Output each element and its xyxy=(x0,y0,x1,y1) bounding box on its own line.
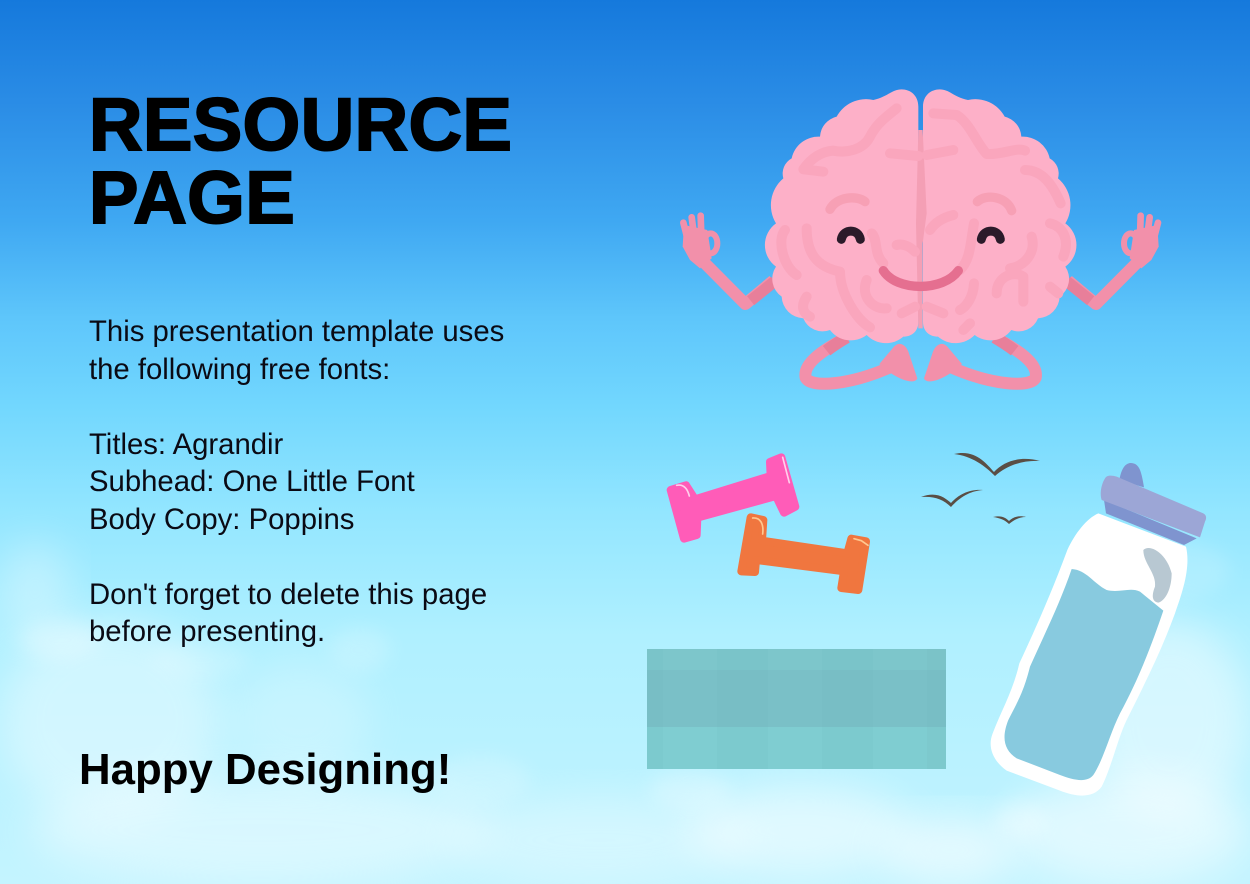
body text: the following free fonts: xyxy=(89,352,390,386)
closing message: Happy Designing! xyxy=(79,745,451,794)
arms and legs xyxy=(683,216,1159,384)
birds xyxy=(921,453,1040,524)
pink and orange dumbbells xyxy=(671,457,868,590)
central fissure xyxy=(916,130,927,328)
brain folds xyxy=(781,108,1066,330)
water xyxy=(1005,569,1163,780)
bottle spout xyxy=(1119,463,1144,487)
body text: Don't forget to delete this page xyxy=(89,578,487,610)
body text: This presentation template uses xyxy=(89,315,504,348)
body text: Titles: Agrandir xyxy=(89,428,283,460)
eyes xyxy=(841,231,1000,239)
bottle body xyxy=(991,513,1187,796)
orange dumbbell xyxy=(741,517,868,590)
title: PAGE xyxy=(89,156,295,239)
title: RESOURCE xyxy=(89,83,512,166)
teal yoga mat xyxy=(647,649,946,769)
title xyxy=(89,83,512,239)
smile xyxy=(883,271,958,286)
pink dumbbell xyxy=(671,457,795,539)
brain character xyxy=(683,89,1159,384)
bottle highlight xyxy=(1143,548,1172,603)
body text: Subhead: One Little Font xyxy=(89,465,415,498)
brain lobes xyxy=(765,89,1076,343)
clouds xyxy=(0,540,1250,884)
bottle cap xyxy=(1101,476,1206,545)
body text xyxy=(89,315,504,648)
eyebrows xyxy=(830,197,1012,211)
body text: before presenting. xyxy=(89,615,325,648)
water bottle xyxy=(991,463,1206,796)
body text: Body Copy: Poppins xyxy=(89,502,354,536)
